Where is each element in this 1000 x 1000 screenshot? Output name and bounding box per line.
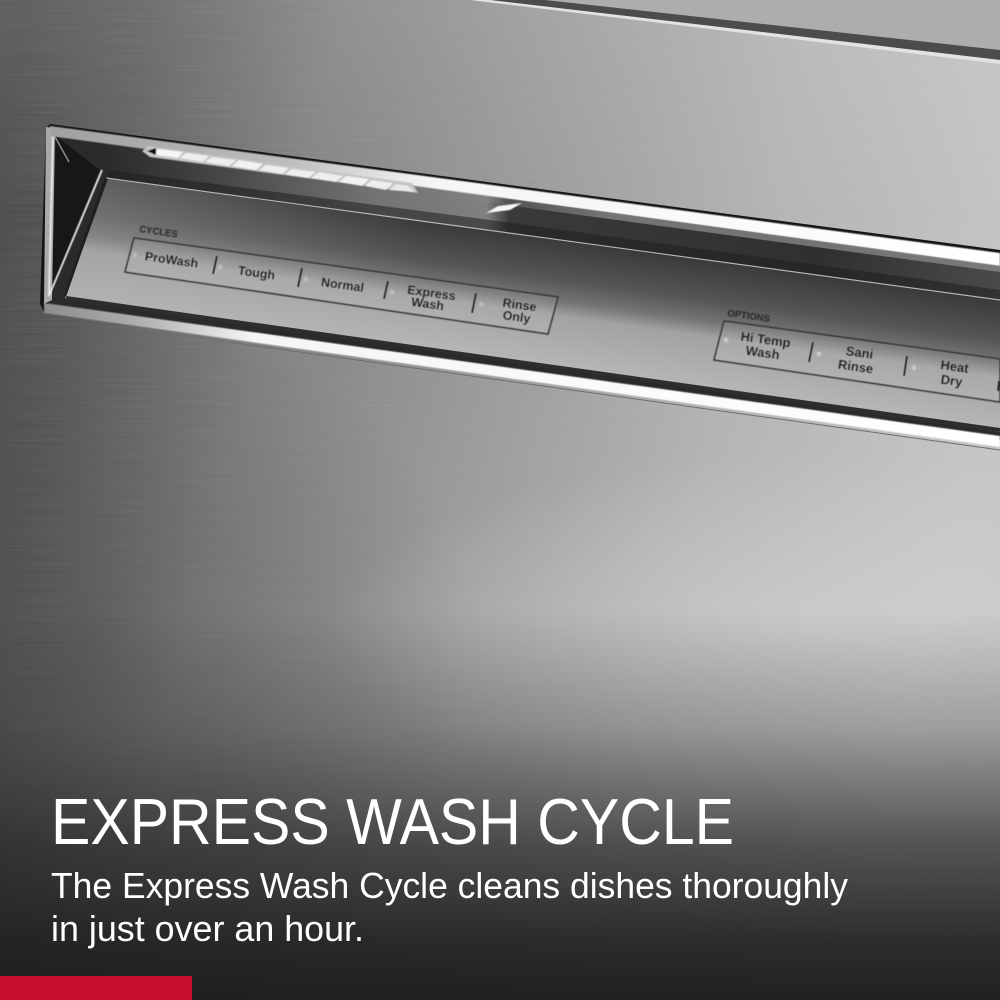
recess outer frame (40, 124, 1000, 312)
option separators (809, 342, 999, 391)
title: EXPRESS WASH CYCLE (51, 785, 734, 858)
handle accent highlight (486, 203, 522, 213)
option lights (724, 338, 916, 370)
shelf below upper lip (136, 149, 1000, 301)
control panel recess (40, 124, 1000, 450)
recess interior (48, 130, 1000, 440)
cycles panel (125, 224, 558, 334)
options panel (714, 308, 1000, 402)
description text (51, 865, 848, 949)
red accent bar (0, 976, 192, 1000)
description text: in just over an hour. (51, 908, 364, 949)
cycle labels (144, 249, 537, 326)
option labels (740, 329, 970, 390)
option labels: Wash (745, 343, 781, 362)
left frame (44, 127, 55, 304)
cycle labels: Rinse (502, 296, 537, 314)
cycle labels: ProWash (144, 249, 199, 271)
shadow above panel (108, 170, 1000, 301)
option labels: Rinse (837, 357, 874, 376)
options button outline (714, 321, 1000, 402)
description text: The Express Wash Cycle cleans dishes thoroughly (51, 865, 848, 906)
cycle labels: Tough (237, 264, 276, 283)
panel left edge (65, 178, 106, 296)
option labels: Dry (940, 372, 964, 390)
indicator light bar (142, 146, 418, 193)
option labels: Sani (845, 343, 874, 362)
inset panel face (65, 179, 1000, 432)
lower lip shadow line (150, 331, 1000, 450)
cycle labels: Express (406, 283, 457, 303)
cycle separators (213, 256, 476, 313)
left side wall (52, 136, 100, 294)
cycle lights (132, 252, 484, 306)
cycle labels: Wash (410, 295, 445, 313)
option labels: Hi Temp (740, 329, 792, 350)
cycles label: CYCLES (139, 224, 178, 240)
lower panel groove (66, 298, 1000, 430)
cycles button outline (125, 238, 558, 334)
upper chrome lip (50, 126, 1000, 266)
cycle labels: Normal (320, 275, 365, 295)
lip lower reflection (494, 198, 1000, 272)
options label: OPTIONS (727, 308, 770, 325)
option labels: Heat (940, 357, 970, 376)
cycle labels: Only (502, 308, 531, 326)
panel top hairline (106, 178, 1000, 300)
lower chrome lip (44, 303, 1000, 447)
left chrome edges (49, 134, 102, 296)
panel left sheen (65, 179, 346, 298)
